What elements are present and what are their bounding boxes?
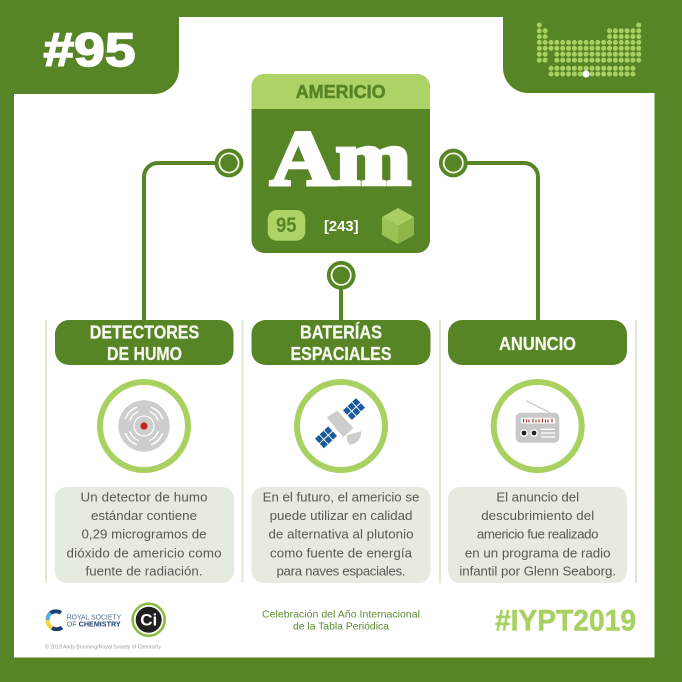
heading pill: DE HUMO (107, 343, 182, 364)
logo: Ci: Ci (140, 610, 157, 630)
element symbol: Am (270, 114, 411, 202)
panel: space batteries (252, 320, 430, 583)
column dividers (46, 320, 636, 583)
connector: card to smoke detectors (144, 163, 229, 322)
heading pill (448, 320, 627, 365)
hashtag: #IYPT2019 (495, 605, 636, 638)
heading pill: ESPACIALES (290, 343, 392, 364)
panel: announcement (448, 320, 627, 583)
description box: en un programa de radio (465, 545, 611, 560)
icon: satellite (297, 382, 385, 470)
connector: card to space batteries (339, 275, 343, 322)
logo: Royal Society of Chemistry: OF CHEMISTRY (67, 620, 121, 628)
node: left (215, 149, 243, 177)
logo: Royal Society of Chemistry (47, 611, 121, 629)
heading pill: DETECTORES (90, 322, 199, 342)
description box: fuente de radiación. (86, 564, 202, 578)
copyright: © 2019 Andy Brunning/Royal Society of Chemistry (45, 643, 161, 650)
description box: descubrimiento del (481, 508, 594, 523)
description box: para naves espaciales. (276, 564, 406, 578)
description box: estándar contiene (91, 508, 197, 523)
icon: periodic table locator (539, 25, 639, 78)
heading pill: ANUNCIO (499, 333, 576, 354)
description box: Un detector de humo (80, 490, 208, 504)
node: bottom (327, 261, 356, 290)
description box: dióxido de americio como (66, 545, 222, 560)
celebration text: Celebración del Año Internacional (262, 609, 420, 621)
description box: infantil por Glenn Seaborg. (459, 564, 616, 578)
description box (252, 487, 430, 583)
description box: 0,29 microgramos de (82, 526, 206, 542)
description box: En el futuro, el americio se (263, 490, 419, 504)
node: right (439, 149, 468, 177)
panel: smoke detectors (55, 320, 234, 583)
heading pill (55, 320, 234, 365)
description box: de alternativa al plutonio (268, 526, 414, 542)
connector: card to announcement (453, 163, 538, 322)
icon: radio (494, 382, 582, 470)
heading pill (252, 320, 430, 365)
logo: Ci (133, 604, 165, 636)
atomic number badge: 95 (276, 214, 297, 237)
description box: El anuncio del (496, 490, 579, 504)
description box: puede utilizar en calidad (270, 508, 412, 523)
icon: smoke detector (100, 382, 188, 470)
icon: cube (382, 208, 414, 244)
description box: como fuente de energía (270, 545, 413, 560)
description box (448, 487, 627, 583)
element name: AMERICIO (296, 82, 386, 102)
element card: americium (252, 74, 430, 253)
atomic number badge (268, 210, 305, 241)
description box (55, 487, 234, 583)
heading pill: BATERÍAS (300, 322, 382, 342)
element number tab text: #95 (44, 23, 136, 76)
celebration text (262, 609, 420, 632)
atomic mass: [243] (324, 218, 358, 235)
celebration text: de la Tabla Periódica (293, 620, 389, 632)
logo: Royal Society of Chemistry: ROYAL SOCIETY (67, 612, 121, 621)
description box: americio fue realizado (477, 526, 599, 542)
